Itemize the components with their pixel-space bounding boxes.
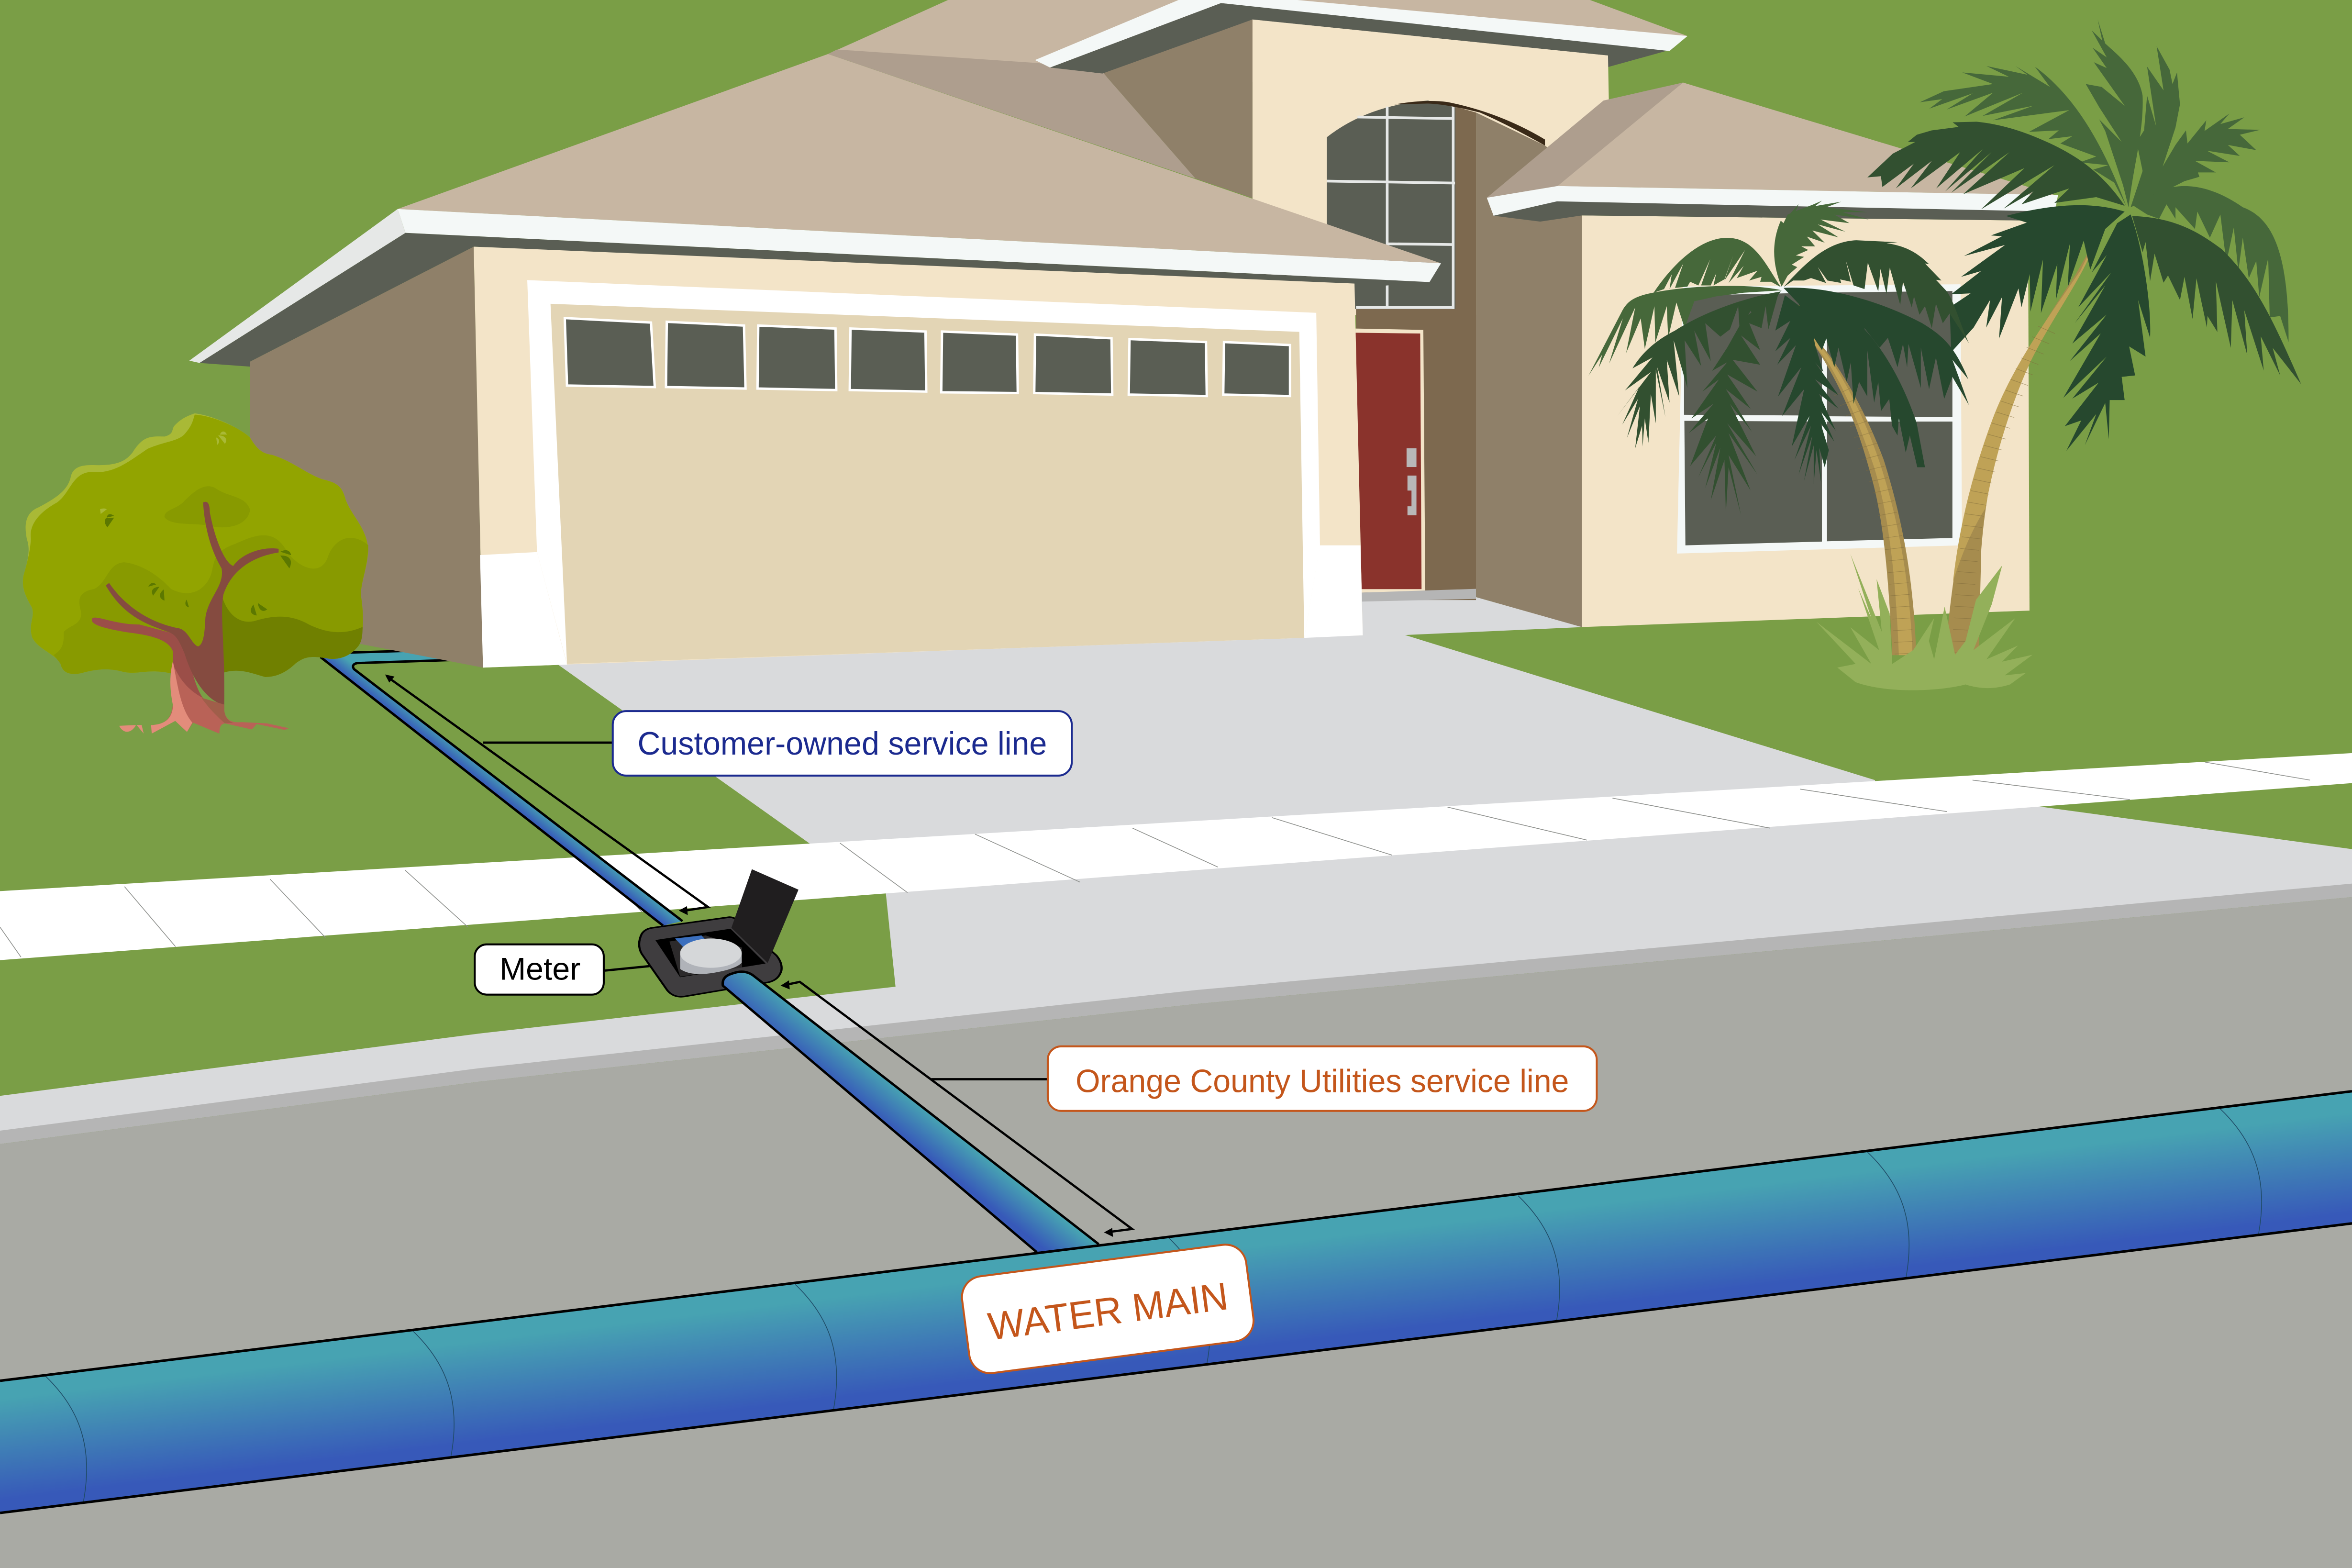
palm trees [1588, 20, 2301, 690]
label: meter [475, 945, 604, 995]
right wing soffit [1494, 201, 2055, 222]
water main pipe [0, 1091, 2352, 1513]
right palm back fronds [1920, 20, 2288, 342]
left palm back fronds [1588, 200, 1869, 376]
upper roof [828, 0, 1687, 90]
tree light leaves [100, 432, 227, 514]
upper roof side plane [828, 50, 1196, 178]
right wing fascia [1487, 186, 2058, 216]
driveway and front walkway [558, 597, 1875, 849]
upper soffit [1050, 3, 1674, 74]
side fascia [189, 209, 405, 363]
garage front wall [474, 246, 1363, 667]
curb strip [0, 884, 2352, 1144]
curb apron [0, 795, 2352, 1134]
front door [1355, 329, 1425, 592]
customer line bracket arrow [385, 675, 708, 915]
OCU line bracket arrow [781, 980, 1132, 1237]
wall base right [1304, 545, 1363, 638]
label: customer-owned service line: Customer-owned service line [637, 726, 1047, 762]
pipe in pit [675, 935, 710, 951]
wall base left [480, 552, 567, 667]
arched window [1327, 100, 1455, 309]
left palm front fronds [1775, 288, 1969, 484]
meter leader [604, 966, 650, 971]
label: customer-owned service line [613, 711, 1072, 776]
water meter box [639, 869, 799, 997]
large front window [1677, 284, 1962, 554]
tree trunk [92, 502, 288, 734]
tree leaves [105, 514, 291, 615]
meter pit opening [655, 929, 766, 977]
right wing roof [1557, 82, 2055, 195]
left palm trunk [1798, 305, 1916, 655]
garage side wall [250, 246, 483, 667]
house [189, 0, 2058, 667]
tree canopy dark shade [222, 595, 363, 677]
label: water main [959, 1242, 1256, 1376]
entry step [1362, 589, 1476, 601]
meter box frame [639, 917, 782, 997]
garage door [551, 304, 1304, 664]
road [0, 897, 2352, 1568]
meter top [680, 938, 742, 968]
tower wall [1253, 20, 1609, 315]
right palm mid fronds [1867, 122, 2301, 384]
sidewalk [0, 753, 2352, 960]
label: Orange County Utilities service line: Orange County Utilities service line [1076, 1063, 1569, 1099]
tree canopy lower shade [54, 535, 368, 677]
tree canopy upper shade [165, 486, 250, 527]
Orange County Utilities service line pipe [723, 972, 1099, 1252]
arch shadow [1394, 101, 1545, 145]
meter pit floor [669, 935, 742, 977]
right wing roof side plane [1487, 82, 1683, 198]
tree canopy highlight [23, 413, 368, 677]
customer-owned service line pipe [321, 650, 683, 925]
garage door frame [527, 280, 1320, 664]
OCU label leader [932, 1079, 1047, 1080]
meter lid [732, 869, 799, 963]
label: meter: Meter [499, 951, 580, 986]
label: Orange County Utilities service line [1048, 1046, 1597, 1111]
main roof [398, 54, 1441, 263]
tree [23, 413, 368, 734]
grass tuft [1816, 554, 2032, 690]
label: water main: WATER MAIN [986, 1274, 1231, 1349]
right palm front fronds [1950, 205, 2150, 451]
right palm trunk [1945, 243, 2094, 664]
tree canopy main [23, 414, 368, 677]
cream patch above arch right [1545, 90, 1609, 157]
upper fascia [1035, 0, 1687, 67]
customer label leader [483, 742, 612, 743]
main fascia [398, 209, 1441, 282]
main soffit [200, 233, 1430, 367]
recessed entry wall [1356, 107, 1476, 600]
entry side wall [1476, 112, 1620, 627]
upper wall shade [1102, 20, 1253, 198]
left palm mid fronds [1617, 240, 1969, 515]
meter body side [680, 953, 742, 974]
garage windows [565, 318, 1290, 396]
right wing wall [1582, 215, 2030, 627]
